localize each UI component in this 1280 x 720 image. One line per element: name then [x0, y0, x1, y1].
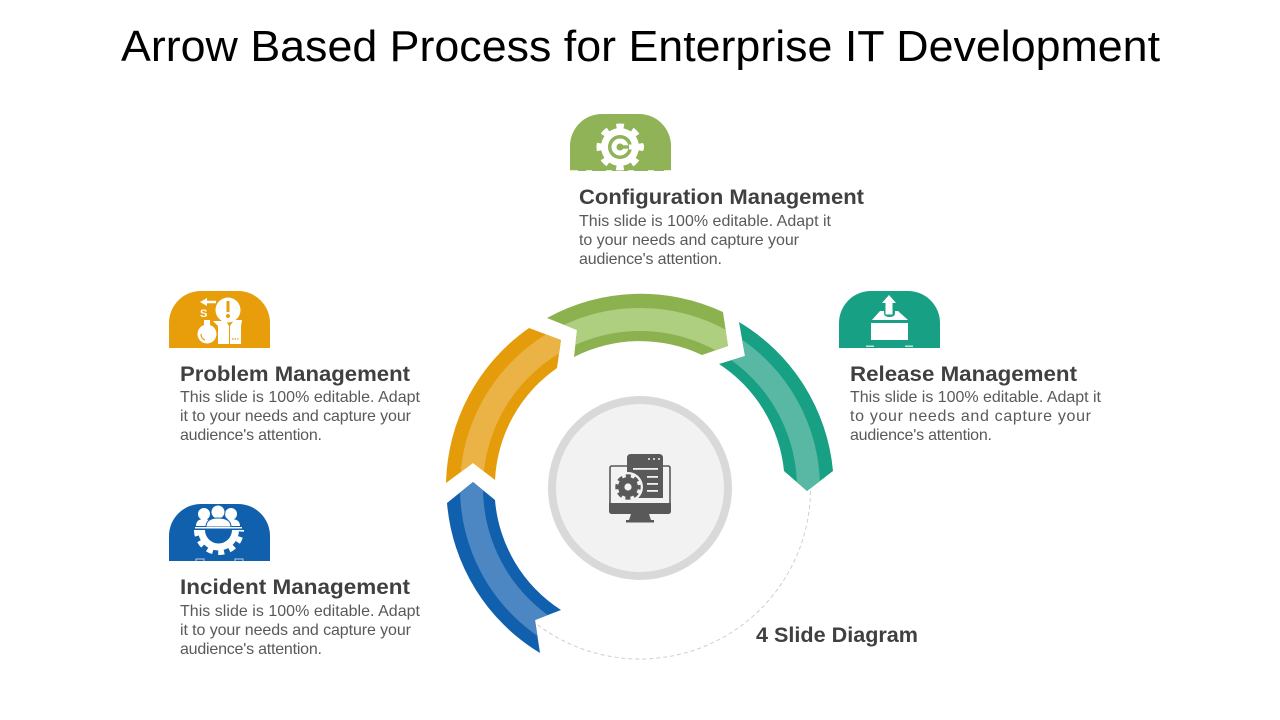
diagram label: 4 Slide Diagram: [756, 624, 918, 647]
body text: This slide is 100% editable. Adapt it: [579, 213, 832, 230]
icon: monitor with gear: [609, 454, 671, 522]
body text: it to your needs and capture your: [180, 622, 412, 639]
heading: Configuration Management: [579, 186, 864, 209]
arrow: problem (orange): [446, 328, 561, 483]
icon tab: orange problem: S: [200, 308, 207, 320]
body text: to your needs and capture your: [850, 408, 1092, 425]
body text: This slide is 100% editable. Adapt: [180, 603, 421, 620]
panel: problem management: [169, 291, 421, 444]
body text: audience's attention.: [579, 251, 722, 268]
body text: audience's attention.: [850, 427, 992, 444]
panel: incident management: [169, 504, 421, 658]
body text: [180, 603, 421, 658]
arrow: release (teal): [719, 322, 833, 491]
body text: to your needs and capture your: [579, 232, 800, 249]
body text: This slide is 100% editable. Adapt it: [850, 389, 1102, 406]
heading: Incident Management: [180, 576, 410, 599]
title: Arrow Based Process for Enterprise IT Development: [121, 22, 1160, 71]
body text: audience's attention.: [180, 641, 322, 658]
body text: [850, 389, 1102, 444]
body text: [579, 213, 832, 268]
body text: [180, 389, 421, 444]
heading: Release Management: [850, 363, 1077, 386]
heading: Problem Management: [180, 363, 410, 386]
body text: it to your needs and capture your: [180, 408, 412, 425]
body text: audience's attention.: [180, 427, 322, 444]
dashed connector circle: [536, 491, 810, 659]
center circle: [552, 400, 728, 576]
panel: configuration management: [570, 114, 864, 268]
arrow: incident (blue): [447, 482, 561, 653]
icon tab: orange problem: [169, 291, 270, 348]
panel: release management: [839, 291, 1102, 444]
arrow: configuration (green): [547, 294, 728, 357]
body text: This slide is 100% editable. Adapt: [180, 389, 421, 406]
icon tab: green wrench gear: [570, 114, 671, 171]
icon tab: blue team gear: [169, 504, 270, 561]
icon tab: teal box with arrow: [839, 291, 940, 348]
